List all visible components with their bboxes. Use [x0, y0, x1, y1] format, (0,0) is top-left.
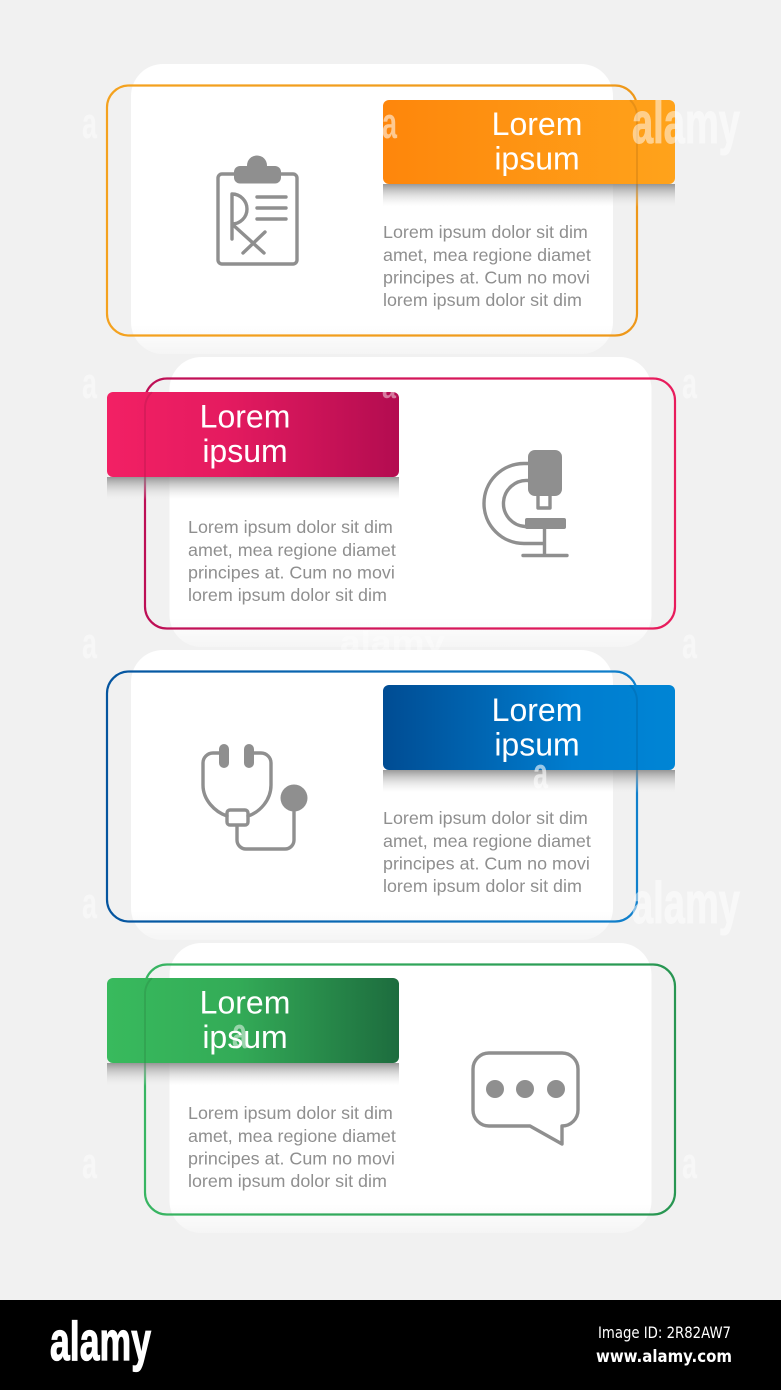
card outline: step 4 [145, 964, 675, 1214]
label shadow: step 4 [107, 1063, 399, 1086]
watermarks: a [382, 372, 396, 405]
text block: step 2: principes at. Cum no movi [188, 562, 395, 582]
label: step 2 [107, 392, 399, 477]
footer logo: alamy [50, 1310, 151, 1372]
card outline: step 1 [107, 86, 637, 336]
icon: prescription clipboard [218, 156, 297, 264]
text block: step 4: Lorem ipsum dolor sit dim [188, 1103, 393, 1123]
text block: step 3: amet, mea regione diamet [383, 831, 591, 851]
heading: step 3: ipsum [494, 726, 580, 762]
watermarks: a [382, 99, 397, 148]
heading: step 4: ipsum [202, 1019, 288, 1055]
text block: step 2: lorem ipsum dolor sit dim [188, 585, 387, 605]
panel: step 2 microscope [107, 357, 675, 647]
icon: microscope [484, 450, 567, 556]
heading: step 2: ipsum [202, 433, 288, 469]
text block: step 2: amet, mea regione diamet [188, 540, 396, 560]
panel: step 4 chat [107, 943, 675, 1233]
label shadow: step 2 [107, 477, 399, 500]
text block: step 3: principes at. Cum no movi [383, 854, 590, 874]
text block: step 4: amet, mea regione diamet [188, 1126, 396, 1146]
card outline: step 2 [145, 378, 675, 628]
card outline: step 3 [107, 672, 637, 922]
watermarks: a [82, 99, 97, 148]
heading: step 1: Lorem [492, 106, 582, 142]
icon: speech bubble [473, 1053, 578, 1144]
text block: step 2: Lorem ipsum dolor sit dim [188, 517, 393, 537]
watermarks: a [682, 359, 697, 408]
footer bar [0, 1300, 781, 1390]
heading: step 3: Lorem [492, 692, 582, 728]
watermarks: a [682, 619, 697, 668]
watermarks: a [82, 1139, 97, 1188]
text block: step 1: Lorem ipsum dolor sit dim [383, 222, 588, 242]
watermarks: a [82, 619, 97, 668]
label: step 4 [107, 978, 399, 1063]
label: step 1 [383, 100, 675, 184]
heading: step 1: ipsum [494, 140, 580, 176]
label shadow: step 3 [383, 770, 675, 793]
website: www.alamy.com [596, 1347, 732, 1367]
watermarks: a [232, 1009, 247, 1058]
icon: stethoscope [203, 744, 308, 849]
label: step 3 [383, 685, 675, 770]
text block: step 4: lorem ipsum dolor sit dim [188, 1171, 387, 1191]
text block: step 3: lorem ipsum dolor sit dim [383, 876, 582, 896]
watermarks: a [682, 1139, 697, 1188]
image id: Image ID: 2R82AW7 [598, 1323, 731, 1342]
heading: step 2: Lorem [200, 398, 290, 434]
text block: step 4: principes at. Cum no movi [188, 1148, 395, 1168]
watermarks: a [82, 359, 97, 408]
panel: step 3 stethoscope [107, 650, 675, 940]
text block: step 3: Lorem ipsum dolor sit dim [383, 808, 588, 828]
watermarks: a [533, 749, 548, 798]
watermarks [82, 91, 740, 1188]
watermarks: a [82, 879, 97, 928]
text block: step 1: principes at. Cum no movi [383, 268, 590, 288]
text block: step 1: amet, mea regione diamet [383, 245, 591, 265]
heading: step 4: Lorem [200, 984, 290, 1020]
watermarks: alamy [340, 626, 445, 659]
label shadow: step 1 [383, 184, 675, 207]
text block: step 1: lorem ipsum dolor sit dim [383, 290, 582, 310]
panel: step 1 prescription [107, 64, 675, 354]
